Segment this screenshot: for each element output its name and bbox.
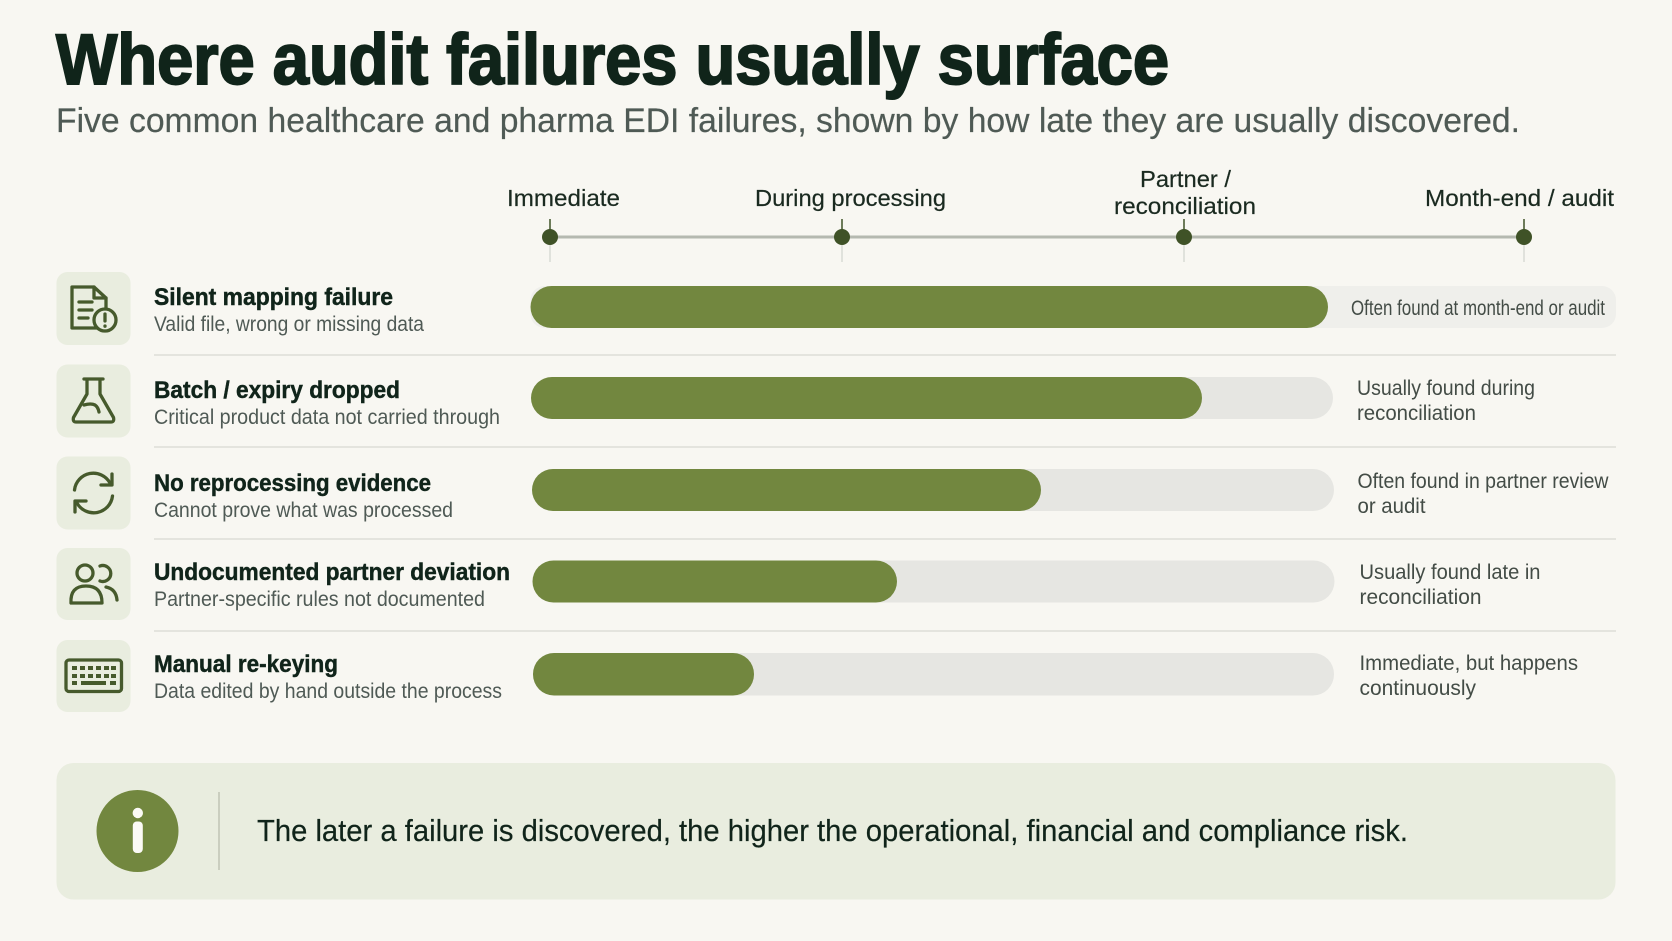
bar: discovery lateness	[532, 560, 1334, 602]
row label: Silent mapping failure	[154, 284, 393, 311]
row label: Manual re-keying	[154, 651, 338, 678]
discovery note	[1358, 470, 1609, 518]
icon: keyboard	[56, 640, 130, 712]
callout	[56, 763, 1616, 900]
row label	[154, 284, 424, 336]
row label: Cannot prove what was processed	[154, 499, 453, 522]
bar: discovery lateness	[532, 469, 1334, 511]
discovery note: Usually found late in	[1360, 561, 1540, 584]
discovery note: or audit	[1358, 495, 1426, 518]
timeline stop: Month-end / audit: Month-end / audit	[1425, 185, 1614, 211]
row: Manual re-keying	[56, 640, 1578, 712]
discovery note: Usually found during	[1357, 377, 1535, 400]
timeline stop: Partner / reconciliation	[1114, 166, 1256, 262]
row label: Undocumented partner deviation	[154, 559, 510, 586]
timeline stop: During processing: During processing	[755, 185, 946, 211]
row label	[154, 559, 510, 611]
discovery note: reconciliation	[1360, 586, 1482, 609]
timeline stop: Partner / reconciliation: reconciliation	[1114, 193, 1256, 219]
discovery note	[1360, 652, 1578, 700]
timeline stop: Immediate: Immediate	[507, 185, 620, 211]
icon: document with alert	[56, 272, 130, 345]
discovery note: continuously	[1360, 677, 1476, 700]
discovery note	[1357, 377, 1535, 425]
icon: two people	[56, 548, 130, 620]
title: Where audit failures usually surface	[56, 21, 1169, 100]
icon: flask	[56, 364, 130, 438]
row label	[154, 470, 453, 522]
row label: Batch / expiry dropped	[154, 377, 400, 404]
timeline stop: Month-end / audit	[1425, 185, 1614, 262]
row label	[154, 651, 502, 703]
row label: Valid file, wrong or missing data	[154, 313, 424, 336]
discovery note: Often found in partner review	[1358, 470, 1609, 493]
icon: info	[96, 790, 178, 872]
timeline axis	[507, 166, 1614, 262]
discovery note	[1360, 561, 1540, 609]
timeline stop: Partner / reconciliation: Partner /	[1140, 166, 1231, 192]
row label	[154, 377, 500, 429]
discovery note: Often found at month-end or audit	[1351, 297, 1605, 320]
subtitle: Five common healthcare and pharma EDI failures, shown by how late they are usually discovered.	[56, 102, 1520, 140]
discovery note: reconciliation	[1357, 402, 1476, 425]
discovery note: Immediate, but happens	[1360, 652, 1578, 675]
row label: No reprocessing evidence	[154, 470, 431, 497]
bar: discovery lateness	[531, 377, 1333, 419]
row label: Partner-specific rules not documented	[154, 588, 485, 611]
callout text: The later a failure is discovered, the higher the operational, financial and compliance risk.	[257, 813, 1408, 848]
row label: Critical product data not carried through	[154, 406, 500, 429]
timeline stop: Immediate	[507, 185, 620, 262]
row: Undocumented partner deviation	[56, 548, 1540, 620]
bar: discovery lateness	[533, 653, 1334, 696]
row: No reprocessing evidence	[56, 456, 1609, 530]
row label: Data edited by hand outside the process	[154, 680, 502, 703]
icon: sync arrows	[56, 456, 130, 530]
bar: discovery lateness	[530, 286, 1616, 328]
row: Batch / expiry dropped	[56, 364, 1535, 438]
row: Silent mapping failure	[56, 272, 1616, 345]
timeline stop: During processing	[755, 185, 946, 262]
